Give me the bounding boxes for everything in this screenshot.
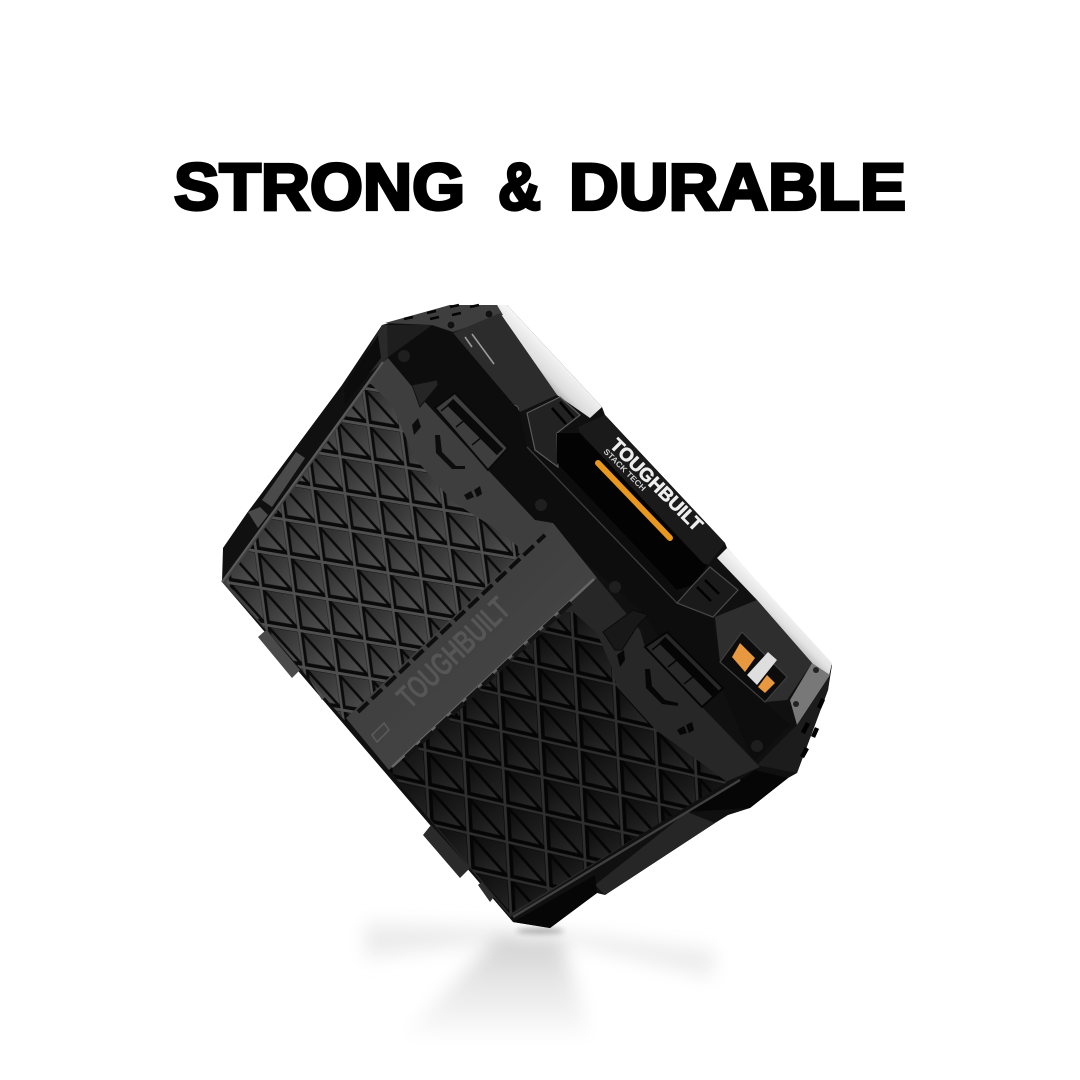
corner plate [790, 663, 830, 725]
upper hinge piece [412, 380, 438, 407]
product: toolbox [222, 305, 832, 928]
latch window [720, 632, 787, 702]
title: STRONG [174, 150, 465, 224]
upper connector [435, 393, 508, 470]
clear lid, upper section [497, 305, 602, 418]
black frame [388, 326, 790, 763]
hinge clip upper [527, 397, 580, 467]
screws [398, 350, 621, 593]
strap dark slots [358, 535, 545, 712]
title [174, 150, 906, 224]
corner side face [343, 325, 432, 405]
latch block [715, 600, 830, 773]
strap lower slots [406, 600, 574, 757]
lower dark band [513, 770, 788, 928]
strap logo mark [372, 723, 389, 742]
title: & [498, 150, 541, 224]
lower panel solid base [389, 578, 760, 917]
hinge clip lower [677, 567, 738, 617]
orange latch parts [732, 643, 755, 672]
handle grip [578, 415, 725, 565]
sub-brand on handle: STACK TECH [602, 447, 648, 493]
panel rim [222, 362, 740, 917]
lower connector [645, 632, 723, 707]
perforated top corner [385, 305, 503, 332]
lower hinge piece [603, 610, 648, 650]
brand on handle: TOUGHBUILT [606, 434, 708, 536]
white latch [747, 652, 777, 685]
floor shadow [365, 923, 715, 1035]
clear lid, lower section [717, 548, 832, 676]
frame rail [527, 447, 677, 603]
strap [346, 523, 597, 770]
side tabs [248, 452, 497, 902]
perforated corner [757, 675, 830, 773]
strap light rim [392, 579, 594, 767]
handle recess [557, 433, 708, 590]
strap brand: TOUGHBUILT [389, 590, 517, 715]
box silhouette [222, 305, 832, 928]
upper panel solid base [222, 358, 597, 770]
top label plate [453, 313, 557, 412]
orange stripe [598, 463, 670, 538]
title: DURABLE [569, 150, 906, 224]
lower marks [617, 650, 694, 735]
lower lattice [389, 612, 727, 914]
upper lattice [226, 383, 525, 722]
upper marks [412, 418, 482, 500]
